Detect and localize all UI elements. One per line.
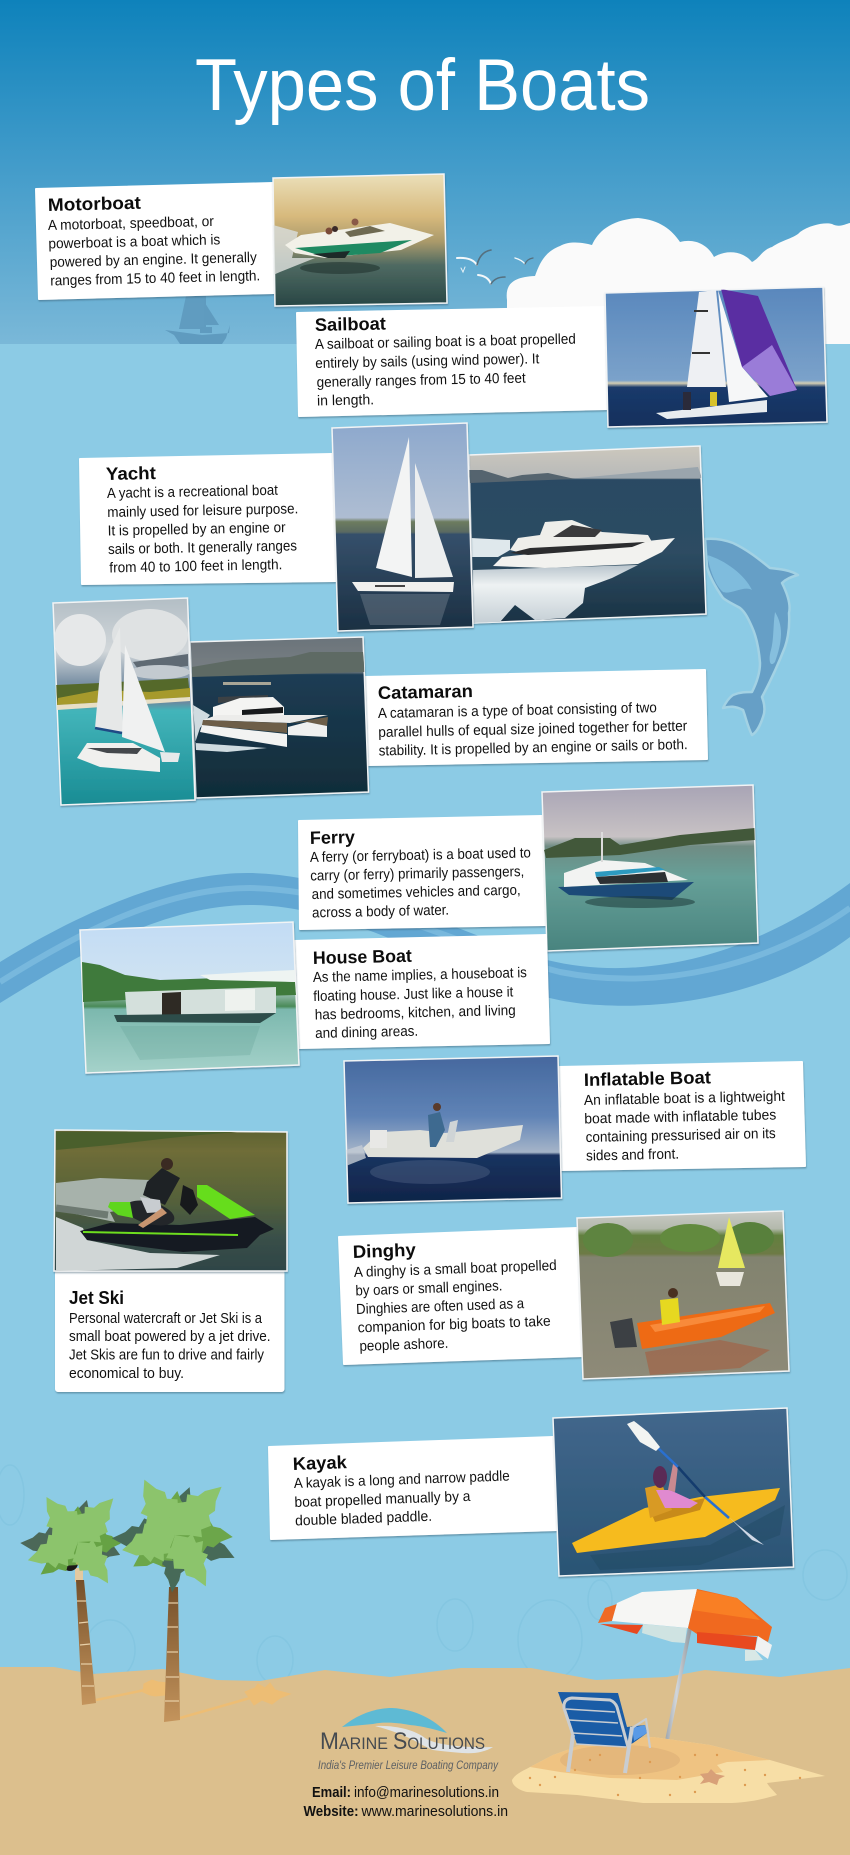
description: companion for big boats to take (358, 1314, 551, 1336)
panel: catamaran (53, 598, 707, 805)
description: across a body of water. (312, 903, 449, 921)
heading: Jet Ski (69, 1288, 124, 1308)
photo: kayak (553, 1408, 794, 1576)
description: ranges from 15 to 40 feet in length. (50, 268, 260, 289)
description: A yacht is a recreational boat (107, 483, 278, 502)
heading: Ferry (310, 827, 355, 848)
description: A catamaran is a type of boat consisting of two (378, 700, 657, 722)
description: by oars or small engines. (355, 1278, 503, 1299)
description: powerboat is a boat which is (48, 232, 220, 252)
description: generally ranges from 15 to 40 feet (317, 371, 526, 391)
description: stability. It is propelled by an engine or sails or both. (379, 737, 688, 759)
card (80, 454, 336, 584)
description: parallel hulls of equal size joined together for better (378, 719, 688, 741)
panel: dinghy (339, 1211, 789, 1379)
dolphin (705, 539, 798, 735)
description: sides and front. (586, 1147, 679, 1164)
card (299, 816, 546, 929)
logo: marine solutions: India's Premier Leisure Boating Company (318, 1758, 499, 1772)
card (294, 935, 549, 1048)
logo: marine solutions: MARINE (320, 1728, 388, 1755)
panel: jet ski (54, 1130, 287, 1391)
logo: marine solutions (318, 1708, 499, 1772)
description: in length. (317, 392, 374, 409)
card (339, 1228, 583, 1364)
panel: motorboat (36, 174, 447, 306)
photo: sailboat (605, 287, 827, 427)
logo: marine solutions: SOLUTIONS (393, 1728, 485, 1755)
description: and dining areas. (315, 1024, 418, 1042)
title: Types of Boats (195, 45, 650, 126)
description: carry (or ferry) primarily passengers, (310, 864, 524, 884)
heading: Motorboat (48, 193, 141, 215)
description: boat propelled manually by a (294, 1489, 472, 1511)
description: has bedrooms, kitchen, and living (315, 1003, 516, 1023)
description: boat made with inflatable tubes (584, 1107, 776, 1127)
description: A motorboat, speedboat, or (48, 214, 214, 234)
description (378, 700, 688, 759)
description: It is propelled by an engine or (107, 520, 286, 539)
description: A dinghy is a small boat propelled (354, 1258, 557, 1281)
palm tree right (111, 1469, 242, 1722)
description: Personal watercraft or Jet Ski is a (69, 1311, 263, 1327)
heading: Dinghy (352, 1240, 416, 1262)
background: sea (0, 344, 850, 1684)
contact details: info@marinesolutions.in (354, 1784, 499, 1801)
contact details: Email: (312, 1784, 351, 1801)
description: Dinghies are often used as a (356, 1296, 525, 1318)
description: powered by an engine. It generally (50, 250, 258, 271)
card (56, 1271, 284, 1391)
panel: yacht (80, 423, 706, 631)
description (584, 1089, 786, 1164)
description (310, 845, 532, 921)
description: people ashore. (359, 1336, 449, 1355)
description (294, 1468, 511, 1529)
heading: Catamaran (378, 681, 473, 703)
heading: Sailboat (315, 314, 386, 335)
photo: inflatable boat (344, 1056, 562, 1203)
umbrella (598, 1589, 772, 1760)
icon: sailboat silhouette (165, 296, 230, 344)
photo: motor catamaran (190, 637, 368, 798)
palm tree left (20, 1486, 127, 1705)
heading: House Boat (313, 946, 412, 968)
description: sails or both. It generally ranges (108, 538, 297, 558)
description: floating house. Just like a house it (313, 984, 513, 1005)
description: Jet Skis are fun to drive and fairly (69, 1348, 265, 1364)
icon: seagulls (457, 250, 533, 284)
background: sky (0, 0, 850, 345)
panel: kayak (269, 1408, 794, 1576)
description (48, 213, 260, 289)
cloud (507, 218, 850, 344)
description (69, 1311, 270, 1382)
card (297, 307, 607, 416)
description: from 40 to 100 feet in length. (109, 557, 282, 576)
description (313, 965, 528, 1042)
description (354, 1258, 560, 1355)
panel: inflatable boat (344, 1056, 805, 1203)
description: An inflatable boat is a lightweight (584, 1089, 785, 1109)
contact details: Website: (304, 1803, 358, 1820)
description: and sometimes vehicles and cargo, (312, 883, 521, 903)
beach chair (558, 1692, 650, 1773)
description: entirely by sails (using wind power). It (315, 351, 539, 372)
description (107, 482, 299, 576)
card (365, 670, 707, 765)
decorative bubbles (0, 1465, 847, 1684)
description: double bladed paddle. (295, 1509, 432, 1529)
photo: sailing catamaran (53, 598, 195, 805)
description: mainly used for leisure purpose. (107, 501, 298, 521)
photo: house boat (80, 922, 299, 1073)
heading: Inflatable Boat (584, 1067, 711, 1090)
waves (0, 873, 850, 1006)
description: A sailboat or sailing boat is a boat propelled (315, 332, 576, 353)
panel: house boat (80, 922, 549, 1073)
contact details (304, 1784, 508, 1820)
card (559, 1062, 805, 1170)
photo: sailing yacht (332, 423, 473, 631)
description: small boat powered by a jet drive. (69, 1329, 270, 1345)
description: A ferry (or ferryboat) is a boat used to (310, 845, 531, 866)
description: A kayak is a long and narrow paddle (294, 1468, 510, 1492)
heading: Kayak (292, 1452, 348, 1474)
photo: jet ski (54, 1130, 287, 1271)
photo: ferry (542, 785, 758, 951)
photo: motorboat (273, 174, 447, 306)
card (269, 1437, 557, 1539)
photo: dinghy (577, 1211, 789, 1379)
description: containing pressurised air on its (586, 1126, 776, 1146)
palm shadows (96, 1680, 290, 1718)
photo: motor yacht (469, 446, 706, 623)
island (512, 1737, 825, 1803)
card (36, 183, 274, 299)
description (315, 332, 577, 409)
heading: Yacht (106, 463, 156, 484)
contact details: www.marinesolutions.in (361, 1803, 508, 1820)
panel: ferry (299, 785, 758, 951)
description: economical to buy. (69, 1366, 184, 1382)
sand beach (0, 1667, 850, 1855)
panel: sailboat (297, 287, 827, 427)
description: As the name implies, a houseboat is (313, 965, 527, 986)
